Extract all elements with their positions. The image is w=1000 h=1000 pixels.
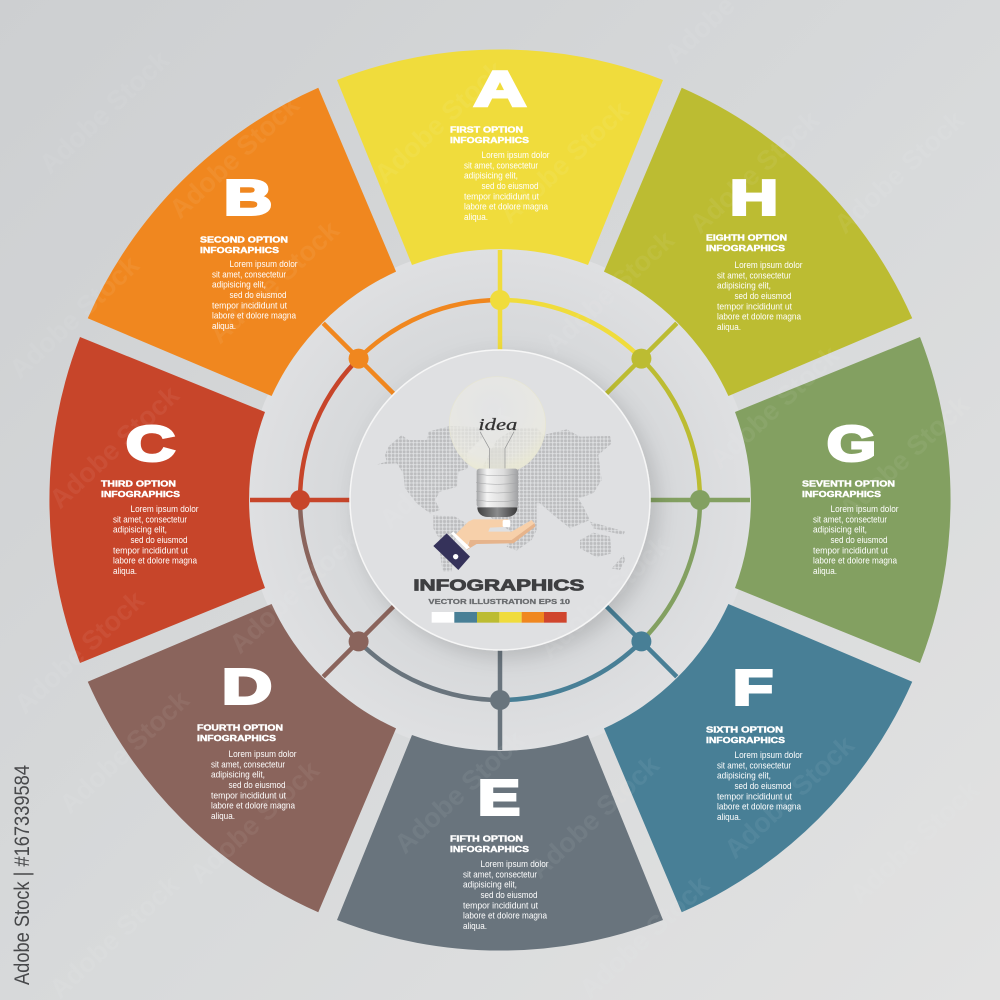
connector ring with spokes bbox=[223, 223, 777, 777]
faint stock watermarks: Adobe Stock bbox=[4, 249, 145, 384]
faint stock watermarks: Adobe Stock bbox=[834, 389, 975, 524]
faint stock watermarks: Adobe Stock bbox=[539, 224, 680, 359]
faint stock watermarks: Adobe Stock bbox=[369, 54, 510, 189]
faint stock watermarks: Adobe Stock bbox=[829, 104, 970, 239]
block A: sed do eiusmod bbox=[482, 181, 538, 191]
block E: INFOGRAPHICS bbox=[450, 845, 530, 854]
block C bbox=[101, 418, 198, 576]
block A: aliqua. bbox=[464, 212, 488, 222]
faint stock watermarks: Adobe Stock bbox=[844, 774, 985, 909]
block H: sed do eiusmod bbox=[734, 291, 792, 301]
block F: adipisicing elit, bbox=[717, 771, 771, 781]
block B: labore et dolore magna bbox=[212, 311, 297, 321]
block C: C bbox=[126, 418, 175, 472]
block G: SEVENTH OPTION bbox=[802, 480, 895, 488]
block H: H bbox=[730, 172, 778, 226]
block D bbox=[197, 660, 296, 821]
block E: adipisicing elit, bbox=[463, 880, 517, 890]
block D: labore et dolore magna bbox=[211, 801, 296, 811]
icon: hand bbox=[433, 519, 535, 570]
faint stock watermarks: Adobe Stock bbox=[719, 729, 860, 864]
block G: G bbox=[827, 418, 876, 472]
block A: INFOGRAPHICS bbox=[450, 136, 530, 145]
block F: sit amet, consectetur bbox=[717, 760, 791, 770]
faint stock watermarks: Adobe Stock bbox=[34, 44, 175, 179]
block H: Lorem ipsum dolor bbox=[734, 260, 802, 270]
block C: sit amet, consectetur bbox=[113, 514, 187, 524]
block B: B bbox=[224, 172, 272, 226]
block H: sit amet, consectetur bbox=[717, 270, 791, 280]
center illustration bbox=[375, 377, 625, 623]
faint stock watermarks: Adobe Stock bbox=[224, 524, 365, 659]
faint stock watermarks: Adobe Stock bbox=[704, 339, 845, 474]
block H: aliqua. bbox=[717, 322, 741, 332]
block E: tempor incididunt ut bbox=[463, 900, 538, 910]
faint stock watermarks: Adobe Stock bbox=[494, 94, 635, 229]
block B: sed do eiusmod bbox=[230, 290, 286, 300]
block E: FIFTH OPTION bbox=[450, 834, 523, 844]
icon: light bulb: idea bbox=[478, 415, 518, 434]
block H: adipisicing elit, bbox=[717, 281, 771, 291]
side credit text: Adobe Stock | #167339584 bbox=[11, 765, 34, 985]
block G: aliqua. bbox=[813, 566, 837, 576]
block C: aliqua. bbox=[113, 566, 137, 576]
block F: Lorem ipsum dolor bbox=[734, 750, 802, 760]
block C: adipisicing elit, bbox=[113, 525, 167, 535]
block D: FOURTH OPTION bbox=[197, 724, 283, 732]
faint stock watermarks: Adobe Stock bbox=[684, 104, 825, 239]
block A: Lorem ipsum dolor bbox=[482, 150, 550, 160]
block F: sed do eiusmod bbox=[734, 781, 792, 791]
color strip bbox=[432, 612, 567, 623]
faint stock watermarks: Adobe Stock bbox=[374, 399, 515, 534]
block D: D bbox=[222, 660, 272, 714]
block B bbox=[200, 172, 298, 331]
block C: INFOGRAPHICS bbox=[101, 490, 181, 499]
block E: E bbox=[478, 772, 520, 826]
block D: tempor incididunt ut bbox=[211, 790, 286, 800]
block A: tempor incididunt ut bbox=[464, 191, 539, 201]
block D: sed do eiusmod bbox=[228, 780, 286, 790]
faint stock watermarks: Adobe Stock bbox=[184, 754, 325, 889]
block A: FIRST OPTION bbox=[450, 126, 523, 134]
panel: center disc bbox=[350, 350, 650, 650]
block H: EIGHTH OPTION bbox=[706, 234, 787, 242]
block B: aliqua. bbox=[212, 321, 236, 331]
block D: adipisicing elit, bbox=[211, 770, 265, 780]
icon: light bulb bbox=[449, 377, 546, 517]
block F: aliqua. bbox=[717, 812, 741, 822]
block F: labore et dolore magna bbox=[717, 802, 802, 812]
block A: adipisicing elit, bbox=[464, 171, 518, 181]
faint stock watermarks: Adobe Stock bbox=[524, 749, 665, 884]
connector nodes bbox=[290, 290, 710, 710]
block G: INFOGRAPHICS bbox=[802, 490, 882, 499]
heading: infographics: INFOGRAPHICS bbox=[413, 578, 585, 595]
block H: INFOGRAPHICS bbox=[706, 244, 786, 253]
block D: sit amet, consectetur bbox=[211, 759, 285, 769]
block A: A bbox=[474, 62, 526, 116]
block H: labore et dolore magna bbox=[717, 312, 802, 322]
block D: aliqua. bbox=[211, 811, 235, 821]
block G: tempor incididunt ut bbox=[813, 545, 888, 555]
faint stock watermarks: Adobe Stock bbox=[204, 214, 345, 349]
block G: Lorem ipsum dolor bbox=[830, 504, 898, 514]
block C: labore et dolore magna bbox=[113, 556, 198, 566]
block G: adipisicing elit, bbox=[813, 525, 867, 535]
block B: sit amet, consectetur bbox=[212, 269, 286, 279]
block E: aliqua. bbox=[463, 921, 487, 931]
block G: sed do eiusmod bbox=[830, 535, 888, 545]
block C: THIRD OPTION bbox=[101, 480, 176, 488]
block F: F bbox=[733, 662, 773, 716]
block A: labore et dolore magna bbox=[464, 202, 549, 212]
block E: labore et dolore magna bbox=[463, 911, 548, 921]
block E: sed do eiusmod bbox=[480, 890, 538, 900]
block F bbox=[706, 662, 802, 822]
block G: sit amet, consectetur bbox=[813, 514, 887, 524]
block H: tempor incididunt ut bbox=[717, 301, 792, 311]
faint stock watermarks: Adobe Stock bbox=[164, 89, 305, 224]
block B: INFOGRAPHICS bbox=[200, 246, 280, 255]
faint stock watermarks: Adobe Stock bbox=[44, 379, 185, 514]
subheading: VECTOR ILLUSTRATION EPS 10 bbox=[428, 599, 570, 606]
block B: Lorem ipsum dolor bbox=[230, 259, 298, 269]
faint stock watermarks: Adobe Stock bbox=[389, 724, 530, 859]
block C: tempor incididunt ut bbox=[113, 545, 188, 555]
world map bbox=[375, 426, 625, 572]
faint stock watermarks: Adobe Stock bbox=[54, 684, 195, 819]
block F: SIXTH OPTION bbox=[706, 726, 783, 734]
faint stock watermarks: Adobe Stock bbox=[9, 584, 150, 719]
block A bbox=[450, 62, 550, 222]
block D: INFOGRAPHICS bbox=[197, 734, 277, 743]
inner light disc bbox=[245, 245, 755, 755]
block D: Lorem ipsum dolor bbox=[228, 749, 296, 759]
block C: sed do eiusmod bbox=[130, 535, 188, 545]
block F: tempor incididunt ut bbox=[717, 791, 792, 801]
block A: sit amet, consectetur bbox=[464, 160, 538, 170]
faint stock watermarks: Adobe Stock bbox=[534, 529, 675, 664]
block H bbox=[706, 172, 802, 332]
block B: adipisicing elit, bbox=[212, 280, 266, 290]
block F: INFOGRAPHICS bbox=[706, 736, 786, 745]
block E: Lorem ipsum dolor bbox=[480, 859, 548, 869]
block B: tempor incididunt ut bbox=[212, 300, 287, 310]
block B: SECOND OPTION bbox=[200, 236, 288, 244]
block C: Lorem ipsum dolor bbox=[130, 504, 198, 514]
block E bbox=[450, 772, 548, 931]
block E: sit amet, consectetur bbox=[463, 869, 537, 879]
block G: labore et dolore magna bbox=[813, 556, 898, 566]
block G bbox=[802, 418, 898, 576]
